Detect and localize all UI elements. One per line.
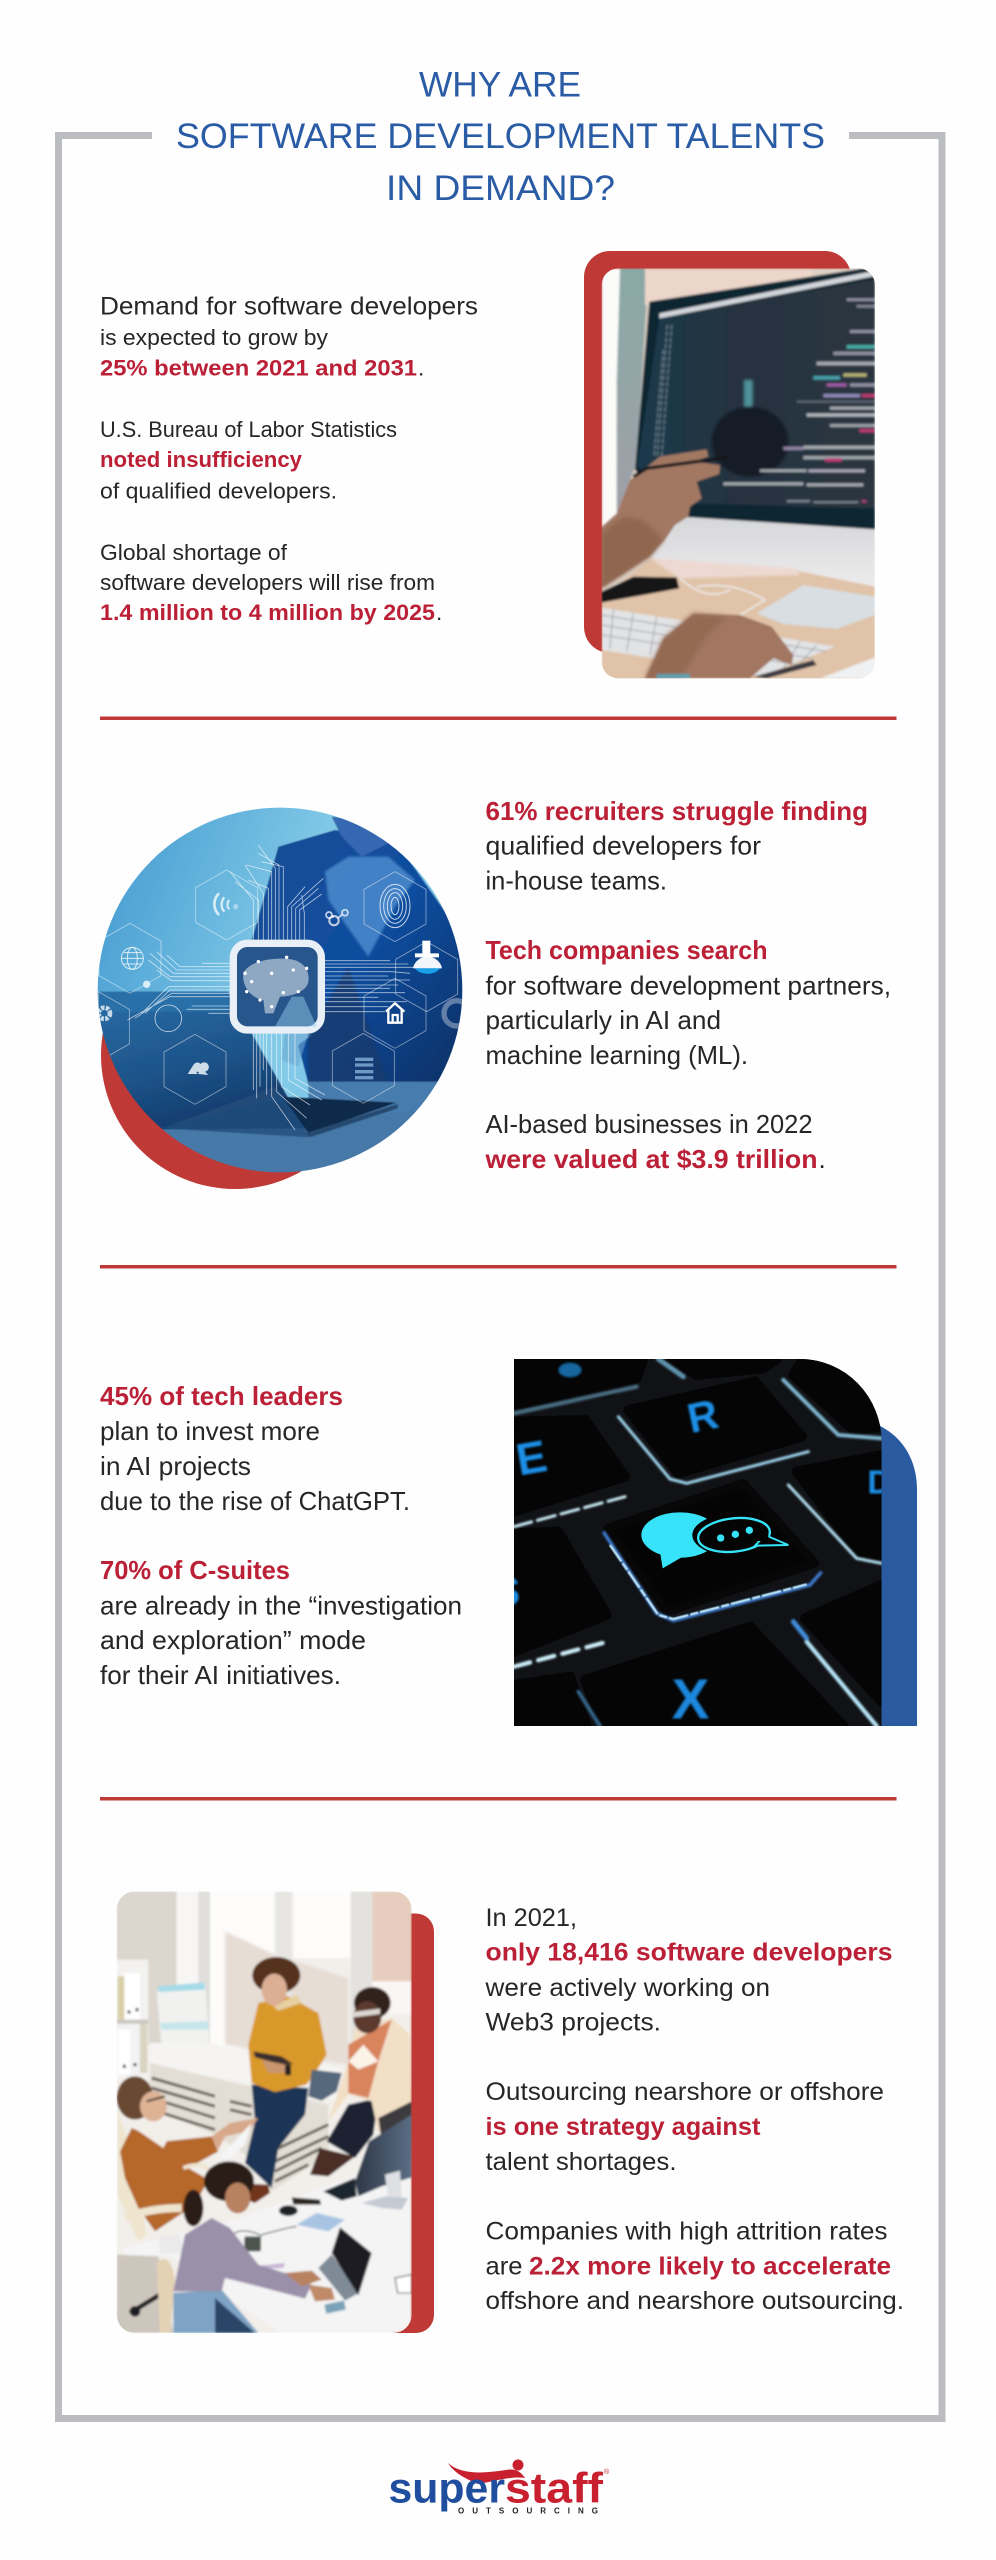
panel: Web3 and outsourcing [117, 1891, 904, 2333]
text block: demand statistics: 1.4 million to 4 million by 2025 [100, 600, 435, 625]
text block: tech leader statistics: 70% of C-suites [100, 1555, 290, 1585]
keyboard letters: E [512, 1430, 551, 1485]
seated man [117, 2076, 270, 2241]
text block: demand statistics: U.S. Bureau of Labor Statistics [100, 417, 397, 442]
hexagon network [98, 870, 458, 1104]
folder on sill [308, 2070, 342, 2101]
text block: recruiter statistics: in-house teams. [486, 866, 667, 896]
divider [100, 1797, 896, 1800]
red backing shape [584, 251, 851, 653]
text block: Web3 and outsourcing statistics: talent shortages. [486, 2148, 676, 2176]
title: SOFTWARE DEVELOPMENT TALENTS [176, 117, 825, 156]
text block: Web3 and outsourcing statistics: offshore and nearshore outsourcing. [486, 2287, 904, 2315]
text block: Web3 and outsourcing statistics: are [486, 2252, 522, 2280]
panel: recruiters and AI [95, 796, 891, 1195]
text block: recruiter statistics: 61% recruiters struggle finding [486, 796, 868, 826]
text block: demand statistics: software developers will rise from [100, 570, 435, 595]
text block: Web3 and outsourcing statistics: were actively working on [484, 1974, 770, 2002]
keyboard letters: X [672, 1668, 710, 1731]
circuit traces [127, 845, 417, 1130]
text block: recruiter statistics: qualified developers for [486, 830, 761, 860]
technology icons [99, 884, 469, 1078]
text block: recruiter statistics: AI-based businesses in 2022 [486, 1109, 812, 1139]
keyboard letters: S [493, 1570, 520, 1614]
red backing shape [380, 1914, 434, 2333]
title [176, 66, 825, 208]
text block: recruiter statistics [484, 796, 891, 1174]
logo: Superstaff Outsourcing: super [388, 2464, 505, 2512]
logo: Superstaff Outsourcing [388, 2460, 610, 2516]
desk [126, 2177, 412, 2332]
text block: tech leader statistics: are already in the “investigation [100, 1590, 462, 1620]
text block: demand statistics: of qualified developers. [100, 478, 337, 504]
logo: Superstaff Outsourcing: staff [505, 2464, 604, 2512]
text block: demand statistics: Demand for software developers [100, 292, 478, 320]
text block: recruiter statistics: machine learning (ML). [486, 1040, 748, 1070]
text block: demand statistics: 25% between 2021 and 2031 [100, 356, 417, 380]
text block: Web3 and outsourcing statistics: Outsourcing nearshore or offshore [486, 2078, 884, 2106]
text block: tech leader statistics: due to the rise of ChatGPT. [100, 1486, 410, 1516]
seated woman at laptop [173, 2161, 335, 2333]
text block: demand statistics: Global shortage of [100, 540, 288, 565]
desk items [158, 2115, 412, 2293]
photo: backlit keyboard with chat key [493, 1359, 891, 1731]
keyboard letters: R [683, 1390, 722, 1442]
standing man in yellow sweater [245, 1957, 327, 2188]
title: IN DEMAND? [386, 169, 615, 208]
whiteboard paper [156, 1989, 210, 2044]
smiling woman [310, 1987, 412, 2176]
photo: team collaborating in office [117, 1891, 412, 2333]
divider [100, 1265, 896, 1268]
key backlight glow [514, 1359, 882, 1726]
text block: Web3 and outsourcing statistics: 2.2x more likely to accelerate [529, 2252, 891, 2280]
content frame [58, 136, 942, 2418]
blue backing shape [840, 1417, 917, 1726]
text block: demand statistics: . [436, 600, 442, 625]
title: WHY ARE [419, 66, 581, 104]
panel: demand statistics [100, 251, 875, 680]
text block: demand statistics: noted insufficiency [100, 447, 302, 472]
floor and chair [117, 2255, 173, 2333]
text block: tech leader statistics: in AI projects [100, 1451, 251, 1481]
red backing circle [101, 921, 369, 1189]
text block: tech leader statistics: and exploration” mode [100, 1625, 366, 1655]
text block: recruiter statistics: . [818, 1144, 826, 1174]
laptop [318, 2255, 359, 2301]
logo: Superstaff Outsourcing: OUTSOURCING [458, 2506, 598, 2516]
text block: tech leader statistics: for their AI initiatives. [100, 1660, 341, 1690]
keyboard letters [493, 1363, 891, 1731]
keyboard letters: D [867, 1464, 891, 1501]
text block: recruiter statistics: Tech companies search [486, 935, 768, 965]
photo: hand pointing at code on monitor [602, 267, 875, 680]
text block: recruiter statistics: were valued at $3.9 trillion [484, 1144, 818, 1174]
text block: Web3 and outsourcing statistics [484, 1904, 904, 2315]
text block: Web3 and outsourcing statistics: only 18,416 software developers [486, 1938, 892, 1966]
text block: demand statistics [100, 292, 478, 625]
window sill and radiator [150, 2042, 216, 2055]
text block: tech leader statistics: plan to invest more [100, 1416, 320, 1446]
text block: Web3 and outsourcing statistics: In 2021, [486, 1904, 577, 1932]
panel: tech leaders and AI [100, 1359, 917, 1731]
text block: tech leader statistics: 45% of tech leaders [100, 1381, 343, 1411]
shelf and binders [117, 1960, 148, 2081]
chip frame with brain [233, 943, 321, 1030]
divider [100, 716, 896, 720]
text block: Web3 and outsourcing statistics: Web3 projects. [486, 2008, 661, 2036]
text block: tech leader statistics [100, 1381, 462, 1690]
text block: demand statistics: is expected to grow by [100, 325, 329, 350]
text block: Web3 and outsourcing statistics: Companies with high attrition rates [486, 2218, 888, 2246]
chat key [603, 1483, 822, 1621]
text block: Web3 and outsourcing statistics: is one strategy against [486, 2113, 761, 2141]
text block: recruiter statistics: for software development partners, [486, 970, 891, 1000]
logo: Superstaff Outsourcing: ® [604, 2468, 610, 2476]
illustration: AI brain chip with technology hexagons [98, 808, 462, 1172]
text block: demand statistics: . [418, 356, 424, 380]
text block: recruiter statistics: particularly in AI and [486, 1005, 721, 1035]
